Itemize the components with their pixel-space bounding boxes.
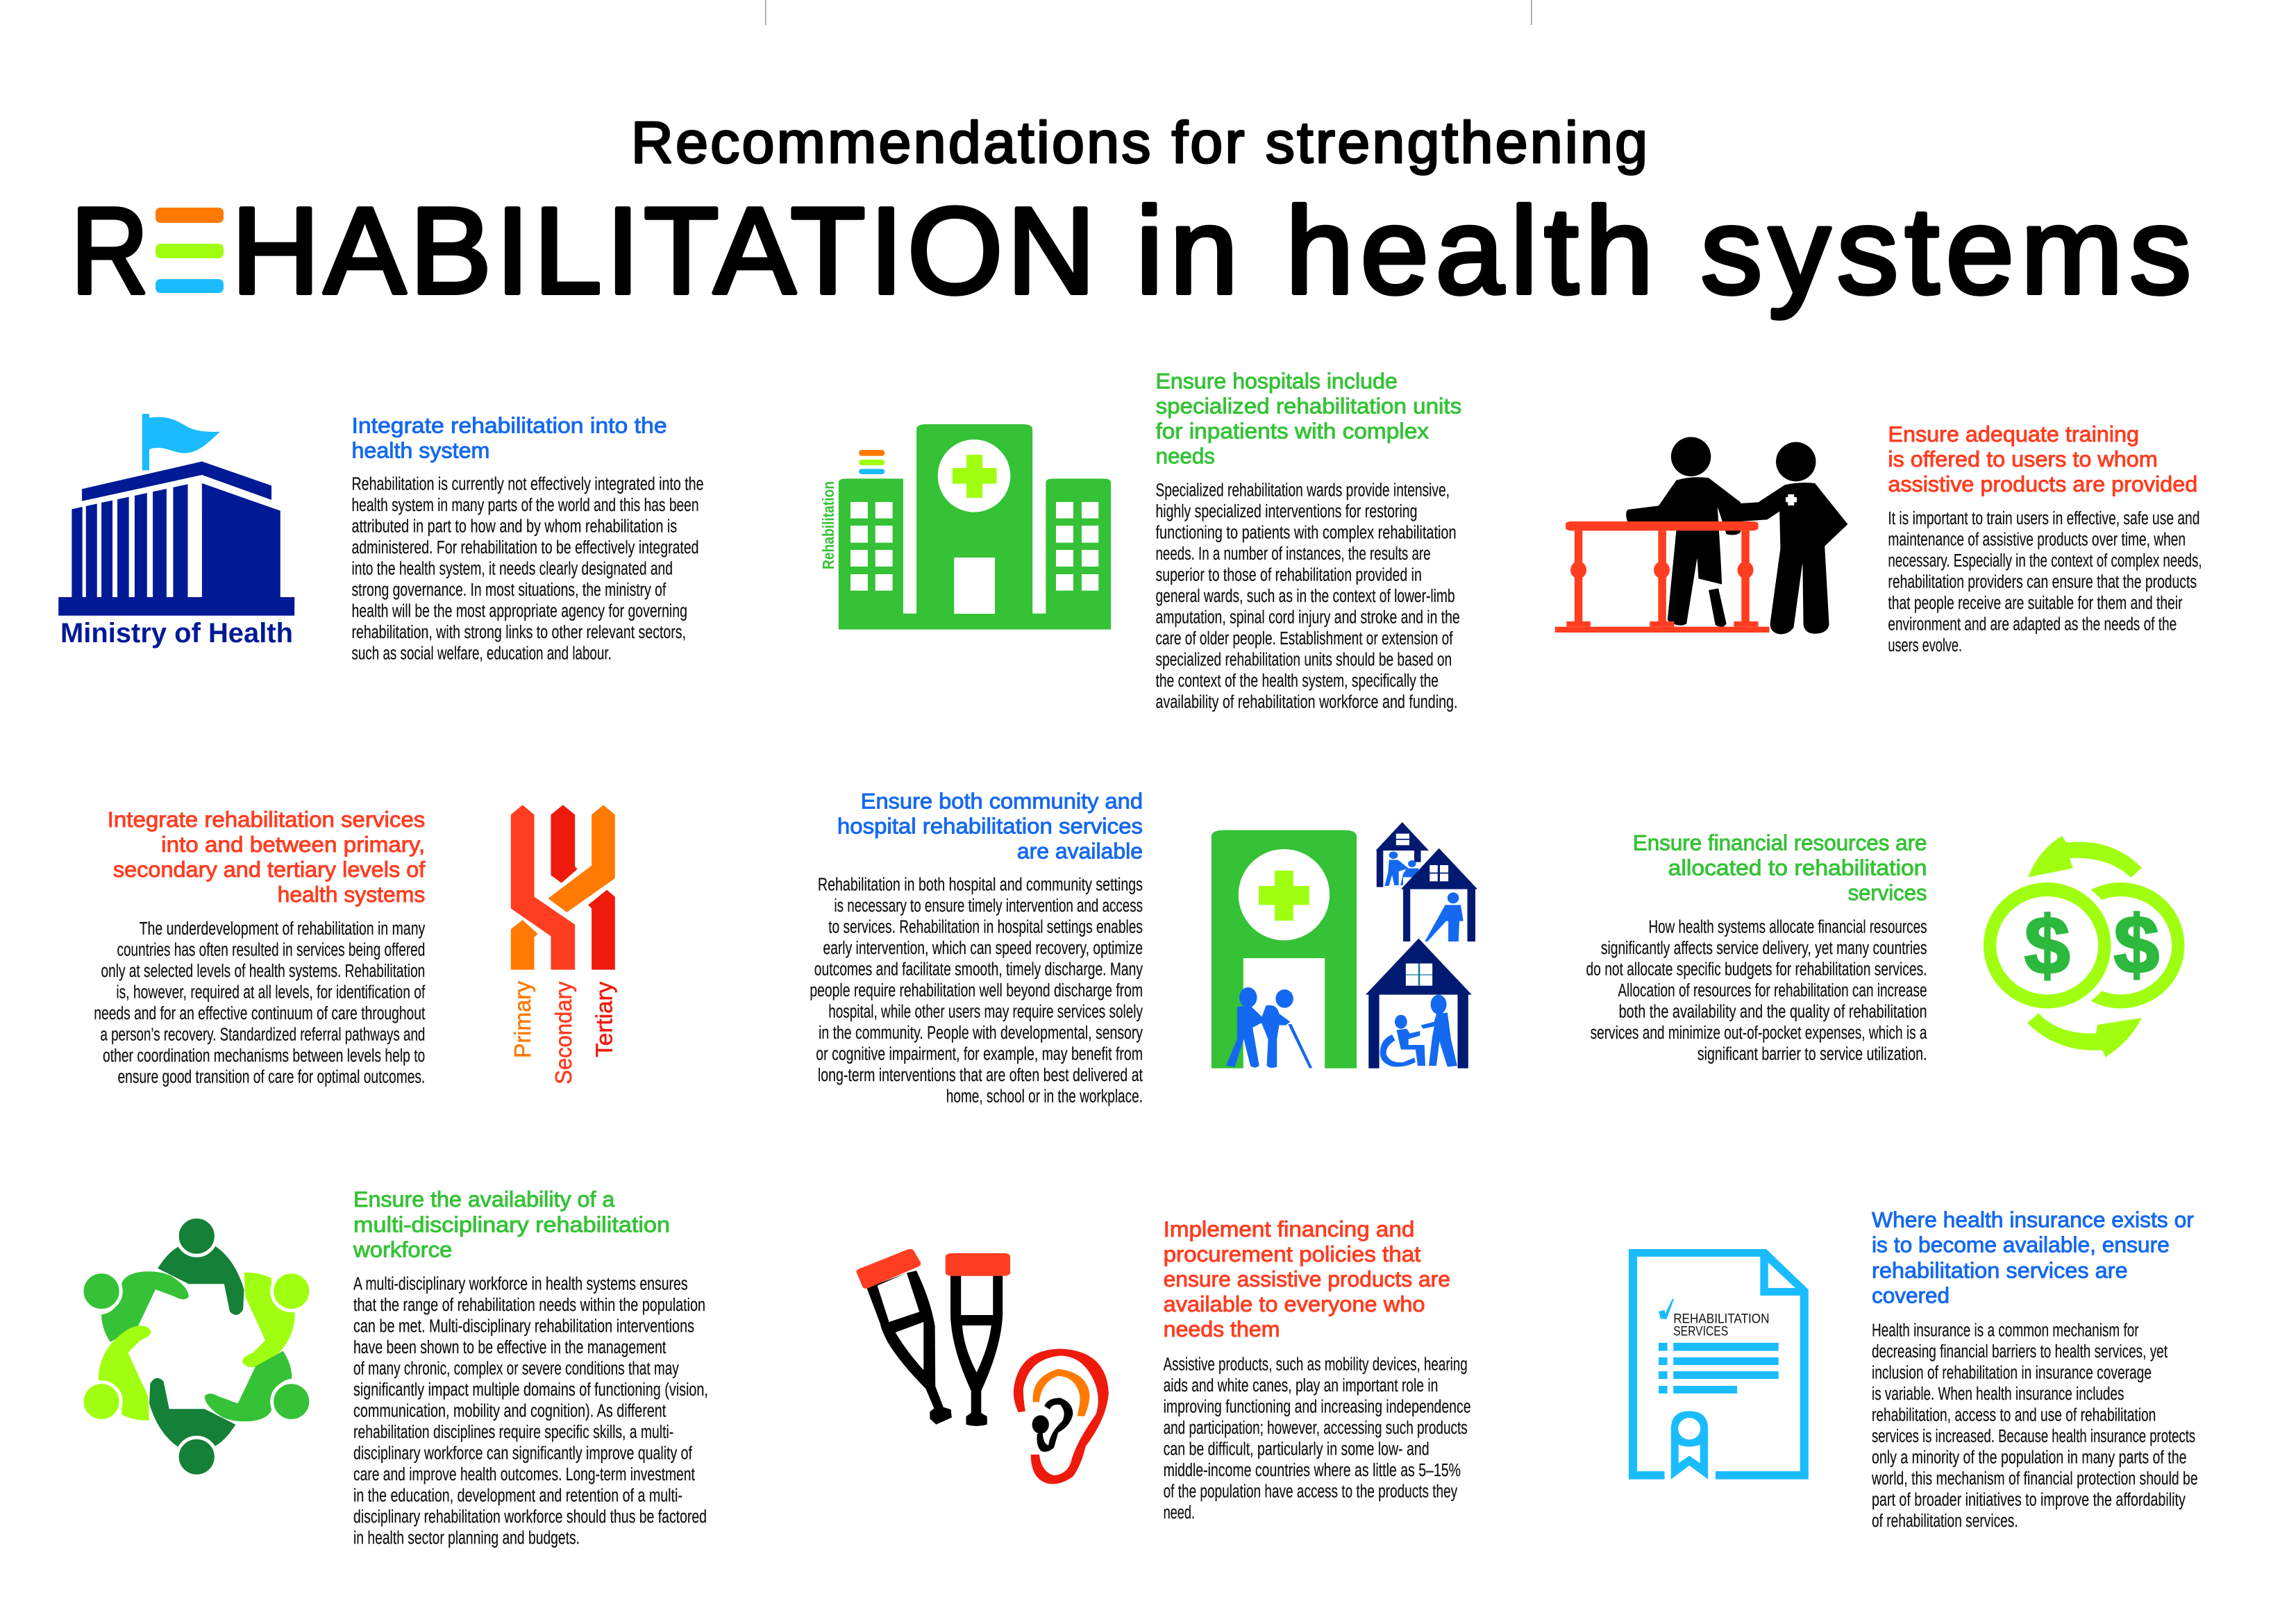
panel: training for assistive products bbox=[1555, 421, 2202, 655]
panel: integrate rehabilitation into the health system bbox=[58, 412, 704, 664]
body text bbox=[351, 475, 704, 664]
body text: rehabilitation, access to and use of rehabilitation bbox=[1872, 1405, 2156, 1425]
heading: for inpatients with complex bbox=[1155, 418, 1429, 443]
body text: How health systems allocate financial resources bbox=[1648, 917, 1927, 937]
heading: services bbox=[1848, 880, 1927, 905]
heading: Where health insurance exists or bbox=[1872, 1207, 2194, 1232]
heading: hospital rehabilitation services bbox=[837, 813, 1143, 838]
icon: user with prosthesis at parallel bars with provider bbox=[1555, 437, 1847, 634]
body text: early intervention, which can speed recovery, optimize bbox=[823, 939, 1143, 958]
heading: is to become available, ensure bbox=[1872, 1232, 2170, 1257]
body text: significant barrier to service utilization. bbox=[1698, 1044, 1927, 1064]
body text: countries has often resulted in services being offered bbox=[117, 940, 425, 960]
body text: users evolve. bbox=[1888, 636, 1962, 655]
body text: of rehabilitation services. bbox=[1872, 1512, 2018, 1531]
body text: attributed in part to how and by whom rehabilitation is bbox=[351, 517, 677, 537]
heading bbox=[351, 412, 667, 462]
body text: A multi-disciplinary workforce in health systems ensures bbox=[353, 1275, 688, 1294]
heading: Integrate rehabilitation into the bbox=[351, 412, 667, 437]
heading: Ensure hospitals include bbox=[1155, 368, 1398, 393]
icon: hospital: Rehabilitation bbox=[819, 481, 837, 569]
body text: strong governance. In most situations, the ministry of bbox=[351, 580, 667, 600]
heading: secondary and tertiary levels of bbox=[113, 857, 426, 882]
body text: general wards, such as in the context of lower-limb bbox=[1155, 587, 1455, 606]
heading: health systems bbox=[278, 882, 425, 907]
body text: decreasing financial barriers to health services, yet bbox=[1872, 1342, 2168, 1362]
title bbox=[71, 110, 2191, 319]
body text: both the availability and the quality of rehabilitation bbox=[1619, 1002, 1927, 1021]
heading: Ensure adequate training bbox=[1888, 421, 2139, 446]
heading bbox=[108, 807, 426, 907]
heading: available to everyone who bbox=[1164, 1291, 1425, 1316]
body text: administered. For rehabilitation to be effectively integrated bbox=[351, 538, 698, 558]
body text: rehabilitation disciplines require specific skills, a multi- bbox=[353, 1423, 673, 1442]
body text: in health sector planning and budgets. bbox=[353, 1529, 580, 1548]
main title: rehabilitation in health systems bbox=[71, 182, 2191, 319]
body text: is necessary to ensure timely intervention and access bbox=[835, 896, 1143, 916]
heading: Ensure financial resources are bbox=[1633, 830, 1927, 855]
body text bbox=[1586, 917, 1927, 1064]
body text: that the range of rehabilitation needs within the population bbox=[353, 1296, 705, 1315]
icon: ministry of health building: Ministry of Health bbox=[60, 618, 293, 648]
body text: only a minority of the population in many parts of the bbox=[1872, 1448, 2187, 1467]
icon: circle of people bbox=[82, 1216, 311, 1476]
body text: needs and for an effective continuum of care throughout bbox=[94, 1004, 425, 1023]
body text: have been shown to be effective in the management bbox=[353, 1338, 666, 1357]
panel: integrate services across levels bbox=[94, 805, 617, 1087]
body text: specialized rehabilitation units should be based on bbox=[1155, 650, 1452, 669]
body text: significantly affects service delivery, yet many countries bbox=[1601, 939, 1927, 958]
heading: needs bbox=[1155, 443, 1215, 468]
panel: financial resources bbox=[1586, 830, 2184, 1064]
body text: Rehabilitation is currently not effectively integrated into the bbox=[351, 475, 704, 494]
body text: part of broader initiatives to improve the affordability bbox=[1872, 1490, 2186, 1509]
label: primary: Primary bbox=[510, 981, 535, 1058]
heading: Integrate rehabilitation services bbox=[108, 807, 425, 832]
icon: primary secondary tertiary pathways bbox=[510, 805, 617, 1085]
panel: community and hospital services bbox=[810, 788, 1477, 1107]
body text: Allocation of resources for rehabilitation can increase bbox=[1618, 981, 1927, 1001]
body text: hospital, while other users may require services solely bbox=[828, 1003, 1143, 1022]
body text: middle-income countries where as little as 5–15% bbox=[1164, 1461, 1461, 1480]
icon: ministry of health building bbox=[58, 414, 294, 648]
icon: insurance document bbox=[1629, 1249, 1809, 1480]
heading: specialized rehabilitation units bbox=[1155, 393, 1461, 418]
body text: inclusion of rehabilitation in insurance coverage bbox=[1872, 1363, 2152, 1382]
icon: crutches and hearing aid bbox=[856, 1249, 1109, 1484]
body text: ensure good transition of care for optimal outcomes. bbox=[118, 1068, 425, 1087]
heading: health system bbox=[351, 437, 489, 462]
subtitle: recommendations for strengthening: Recommendations for strengthening bbox=[631, 110, 1648, 175]
body text: disciplinary rehabilitation workforce should thus be factored bbox=[353, 1507, 707, 1527]
heading: allocated to rehabilitation bbox=[1668, 855, 1927, 880]
heading: multi-disciplinary rehabilitation bbox=[353, 1212, 670, 1237]
body text: into the health system, it needs clearly designated and bbox=[351, 560, 673, 579]
body text: Assistive products, such as mobility devices, hearing bbox=[1164, 1355, 1468, 1374]
heading: Implement financing and bbox=[1164, 1216, 1414, 1241]
body text: care of older people. Establishment or extension of bbox=[1155, 629, 1453, 648]
body text: that people receive are suitable for them and their bbox=[1888, 594, 2183, 613]
body text bbox=[810, 876, 1143, 1107]
body text: only at selected levels of health systems. Rehabilitation bbox=[101, 962, 425, 981]
body text: care and improve health outcomes. Long-term investment bbox=[353, 1465, 695, 1484]
body text: long-term interventions that are often best delivered at bbox=[818, 1066, 1143, 1085]
heading bbox=[353, 1187, 670, 1262]
heading: Ensure the availability of a bbox=[353, 1187, 615, 1212]
body text: is, however, required at all levels, for identification of bbox=[116, 983, 426, 1003]
panel: financing and procurement bbox=[856, 1216, 1470, 1523]
body text: or cognitive impairment, for example, may benefit from bbox=[816, 1045, 1143, 1064]
main title: rehabilitation in health systems: R bbox=[71, 182, 149, 319]
panel: health insurance bbox=[1629, 1207, 2198, 1531]
body text: to services. Rehabilitation in hospital settings enables bbox=[828, 918, 1143, 937]
body text: and participation; however, accessing such products bbox=[1164, 1418, 1468, 1438]
body text: home, school or in the workplace. bbox=[946, 1087, 1143, 1107]
body text: availability of rehabilitation workforce and funding. bbox=[1155, 692, 1458, 712]
body text: aids and white canes, play an important role in bbox=[1164, 1376, 1438, 1396]
panel: multi-disciplinary workforce bbox=[82, 1187, 708, 1548]
heading: needs them bbox=[1164, 1316, 1280, 1341]
icon: dollar coins with circular arrows: $ bbox=[2113, 899, 2159, 991]
body text: Rehabilitation in both hospital and community settings bbox=[818, 876, 1143, 895]
body text: in the education, development and retention of a multi- bbox=[353, 1486, 682, 1505]
body text: amputation, spinal cord injury and stroke and in the bbox=[1155, 608, 1460, 627]
icon: insurance document: REHABILITATION bbox=[1673, 1312, 1769, 1327]
heading: assistive products are provided bbox=[1888, 471, 2197, 496]
body text: improving functioning and increasing independence bbox=[1164, 1397, 1470, 1416]
icon: dollar coins with circular arrows bbox=[1975, 836, 2184, 1057]
heading bbox=[1872, 1207, 2194, 1307]
heading: procurement policies that bbox=[1164, 1241, 1421, 1266]
body text: of many chronic, complex or severe conditions that may bbox=[353, 1359, 679, 1379]
heading: is offered to users to whom bbox=[1888, 446, 2158, 471]
body text: services and minimize out-of-pocket expenses, which is a bbox=[1591, 1023, 1927, 1043]
body text: of the population have access to the products they bbox=[1164, 1482, 1457, 1501]
body text: need. bbox=[1164, 1503, 1195, 1523]
body text: The underdevelopment of rehabilitation in many bbox=[140, 919, 425, 939]
label: tertiary: Tertiary bbox=[592, 981, 617, 1057]
body text: other coordination mechanisms between levels help to bbox=[103, 1046, 425, 1066]
label: secondary: Secondary bbox=[551, 981, 576, 1085]
heading: covered bbox=[1872, 1282, 1950, 1307]
heading: workforce bbox=[353, 1237, 452, 1262]
body text: can be difficult, particularly in some low- and bbox=[1164, 1439, 1430, 1459]
body text bbox=[1871, 1321, 2198, 1531]
body text: such as social welfare, education and labour. bbox=[351, 644, 612, 664]
body text: people require rehabilitation well beyond discharge from bbox=[810, 981, 1143, 1001]
icon: hospital bbox=[819, 424, 1111, 630]
body text: Health insurance is a common mechanism for bbox=[1872, 1321, 2139, 1340]
body text bbox=[1888, 509, 2202, 655]
heading: ensure assistive products are bbox=[1164, 1266, 1450, 1291]
body text: the context of the health system, specifically the bbox=[1155, 671, 1439, 691]
heading bbox=[837, 788, 1143, 863]
main title: rehabilitation in health systems: in health systems bbox=[1136, 182, 2191, 319]
heading: into and between primary, bbox=[161, 832, 425, 857]
body text: health will be the most appropriate agency for governing bbox=[351, 602, 687, 621]
icon: dollar coins with circular arrows: $ bbox=[2025, 900, 2070, 991]
body text: in the community. People with developmental, sensory bbox=[819, 1023, 1143, 1043]
body text: do not allocate specific budgets for rehabilitation services. bbox=[1586, 960, 1927, 979]
main title: rehabilitation in health systems: HABILITATION bbox=[231, 182, 1096, 319]
body text: a person’s recovery. Standardized referral pathways and bbox=[100, 1025, 425, 1044]
body text: needs. In a number of instances, the results are bbox=[1155, 544, 1431, 564]
body text: superior to those of rehabilitation provided in bbox=[1155, 565, 1422, 585]
body text: Specialized rehabilitation wards provide intensive, bbox=[1155, 480, 1450, 500]
body text: is variable. When health insurance includes bbox=[1872, 1384, 2124, 1404]
body text bbox=[1155, 480, 1460, 712]
body text bbox=[94, 919, 426, 1087]
heading bbox=[1164, 1216, 1450, 1341]
body text bbox=[1164, 1355, 1470, 1523]
body text: maintenance of assistive products over time, when bbox=[1888, 530, 2186, 550]
icon: insurance document: SERVICES bbox=[1673, 1324, 1728, 1339]
body text: highly specialized interventions for restoring bbox=[1155, 502, 1417, 521]
body text: health system in many parts of the world and this has been bbox=[351, 496, 698, 515]
body text: disciplinary workforce can significantly improve quality of bbox=[353, 1444, 693, 1464]
body text bbox=[353, 1275, 708, 1548]
body text: communication, mobility and cognition). As different bbox=[353, 1401, 666, 1421]
body text: outcomes and facilitate smooth, timely discharge. Many bbox=[814, 960, 1143, 980]
heading bbox=[1888, 421, 2197, 496]
body text: significantly impact multiple domains of functioning (vision, bbox=[353, 1380, 708, 1400]
heading: are available bbox=[1017, 838, 1143, 863]
body text: can be met. Multi-disciplinary rehabilitation interventions bbox=[353, 1316, 694, 1336]
heading: rehabilitation services are bbox=[1872, 1257, 2128, 1282]
heading bbox=[1633, 830, 1927, 905]
heading: Ensure both community and bbox=[861, 788, 1143, 813]
body text: environment and are adapted as the needs of the bbox=[1888, 615, 2177, 635]
icon: hospital and community homes bbox=[1212, 822, 1477, 1069]
heading bbox=[1155, 368, 1461, 468]
panel: specialized rehabilitation units bbox=[819, 368, 1461, 712]
body text: functioning to patients with complex rehabilitation bbox=[1155, 523, 1457, 542]
body text: rehabilitation, with strong links to other relevant sectors, bbox=[351, 623, 686, 642]
